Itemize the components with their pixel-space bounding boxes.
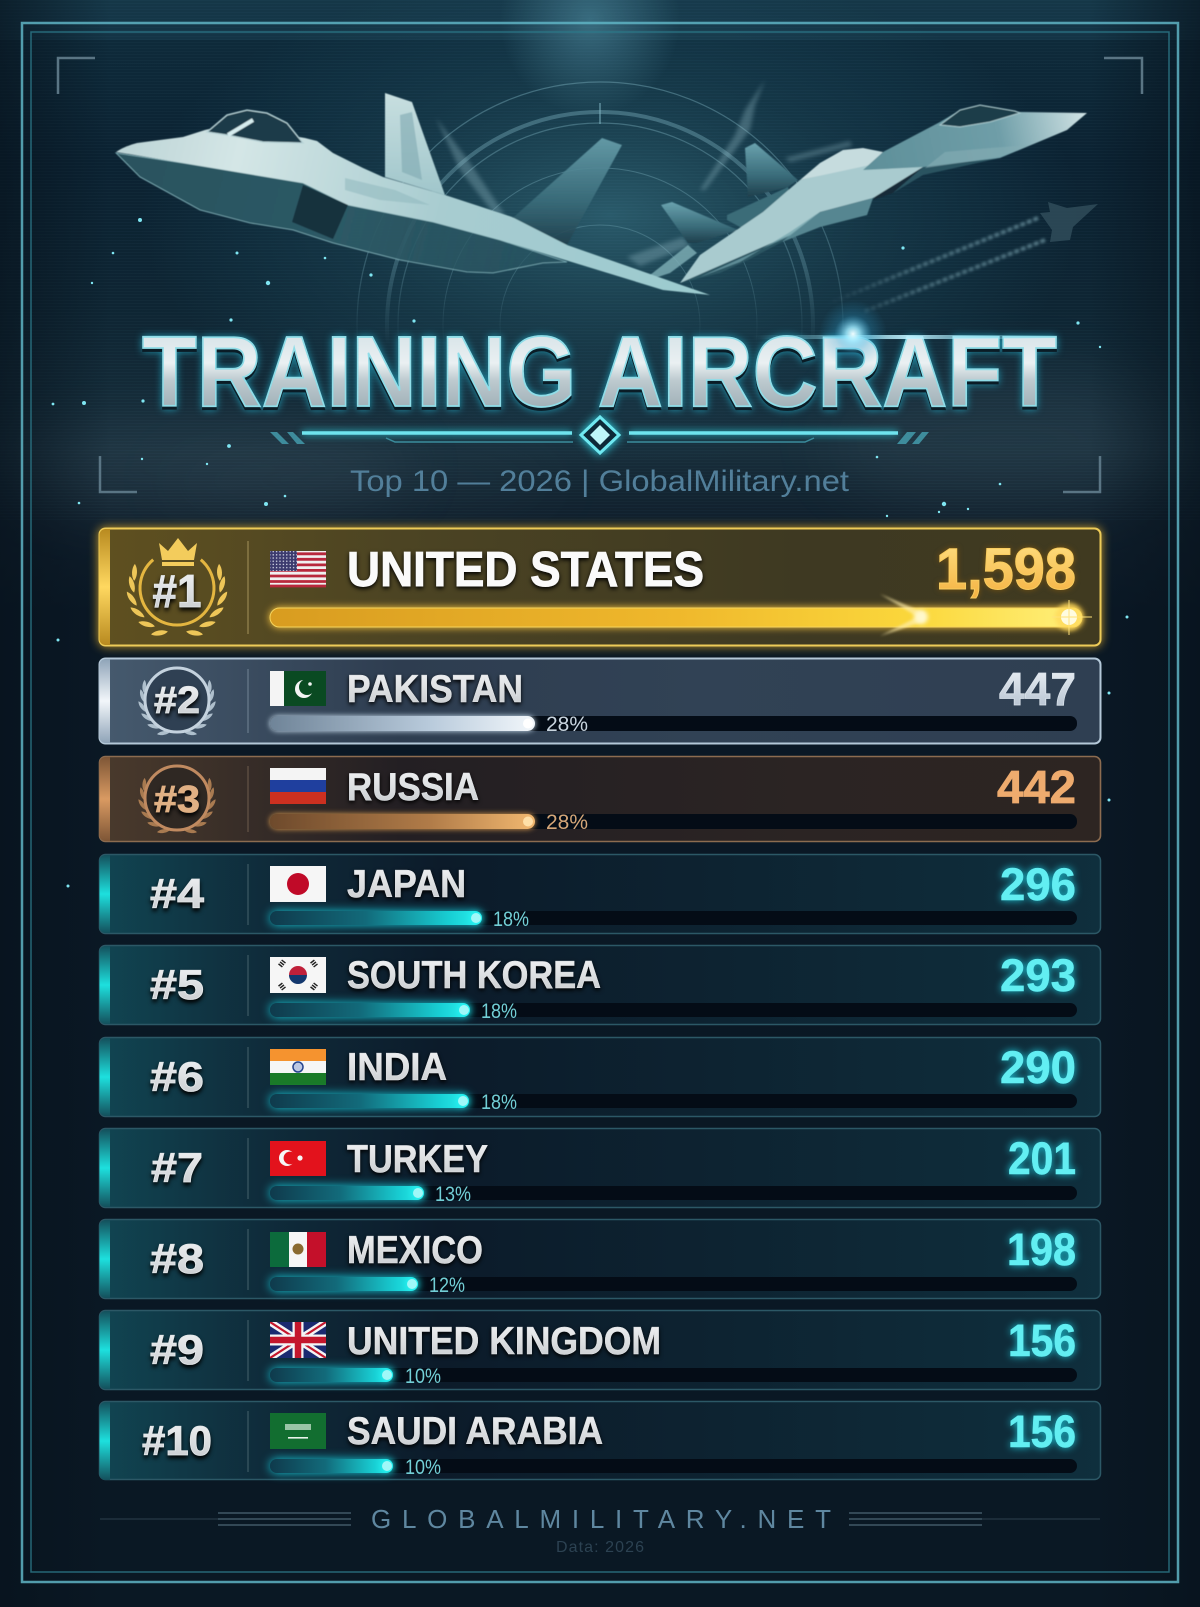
value: 447 [999,663,1076,715]
corner brackets [58,58,1142,492]
flag: India [270,1049,326,1085]
row 2: Pakistan [99,658,1100,744]
flag: Japan [270,866,326,902]
name: MEXICO [347,1229,483,1272]
percent: 28% [546,713,588,736]
flag: South Korea [270,957,326,993]
footer lines [100,1513,1100,1525]
distant jet silhouette [1040,202,1098,242]
rank: #5 [150,961,204,1008]
jet left [116,93,710,295]
accent [99,659,110,743]
rank badge 2 [136,668,218,737]
accent [99,757,110,841]
bar [270,1459,1077,1473]
accent [99,1129,110,1207]
lens flare [753,300,1059,368]
bar [270,1186,1077,1200]
name: TURKEY [347,1138,488,1181]
streaks [436,80,852,266]
contrails [820,218,1045,312]
value: 156 [1008,1315,1076,1366]
flag: Turkey [270,1141,326,1176]
bar [270,1003,1077,1017]
title divider [270,417,929,453]
jet right [640,105,1087,283]
flag: Pakistan [270,671,326,706]
subtitle: Top 10 — 2026 | GlobalMilitary.net [350,465,850,498]
percent: 12% [429,1274,465,1297]
flag: United Kingdom [270,1322,326,1358]
rank: #9 [150,1326,204,1373]
bar [270,1277,1077,1291]
name: SAUDI ARABIA [347,1410,603,1453]
accent [99,529,110,645]
flag: Mexico [270,1232,326,1267]
value: 296 [1000,859,1076,910]
name: INDIA [347,1046,447,1089]
name: PAKISTAN [347,668,523,711]
rank badge 1 [124,538,230,638]
value: 201 [1008,1133,1076,1184]
rank badge 1: #1 [152,565,202,617]
rank badge 3 [136,766,218,835]
rank badge 2: #2 [154,680,200,722]
row 9: United Kingdom [99,1310,1100,1390]
percent: 18% [481,1091,517,1114]
rank: #4 [150,870,205,917]
flag: USA [270,551,326,587]
percent: 18% [481,1000,517,1023]
background stars [52,218,1129,888]
bar [270,594,1092,636]
rank: #7 [151,1144,203,1191]
row 7: Turkey [99,1128,1100,1208]
row 8: Mexico [99,1220,1100,1298]
bar [270,911,1077,925]
name: RUSSIA [347,766,479,809]
accent [99,1220,110,1298]
bar [270,1094,1077,1108]
name: UNITED STATES [347,543,704,597]
name: UNITED KINGDOM [347,1320,661,1363]
name: JAPAN [347,863,466,906]
row 1: United States [99,528,1100,646]
percent: 28% [546,811,588,834]
accent [99,1038,110,1116]
accent [99,946,110,1024]
rank: #10 [142,1417,212,1464]
row 3: Russia [99,756,1100,842]
accent [99,1311,110,1389]
percent: 10% [405,1456,441,1479]
percent: 10% [405,1365,441,1388]
value: 198 [1007,1224,1076,1275]
row 6: India [99,1038,1100,1116]
flag: Russia [270,768,326,804]
footer brand: GLOBALMILITARY.NET [371,1504,831,1534]
percent: 13% [435,1183,471,1206]
value: 1,598 [936,537,1076,602]
rank: #6 [150,1053,204,1100]
bar [270,814,1077,829]
bar [270,1368,1077,1382]
value: 293 [1000,950,1076,1001]
value: 442 [997,761,1076,813]
value: 290 [1000,1042,1076,1093]
rank: #8 [150,1235,204,1282]
row 10: Saudi Arabia [99,1402,1101,1480]
bar [270,716,1077,731]
name: SOUTH KOREA [347,954,601,997]
row 5: South Korea [99,946,1100,1024]
data note: Data: 2026 [556,1539,644,1556]
title: TRAINING AIRCRAFT [142,316,1057,428]
value: 156 [1008,1406,1076,1457]
radar rings [357,82,843,568]
accent [99,1402,110,1480]
flag: Saudi Arabia [270,1413,326,1449]
rank badge 3: #3 [154,779,200,821]
row 4: Japan [99,854,1100,934]
percent: 18% [493,908,529,931]
accent [99,855,110,933]
